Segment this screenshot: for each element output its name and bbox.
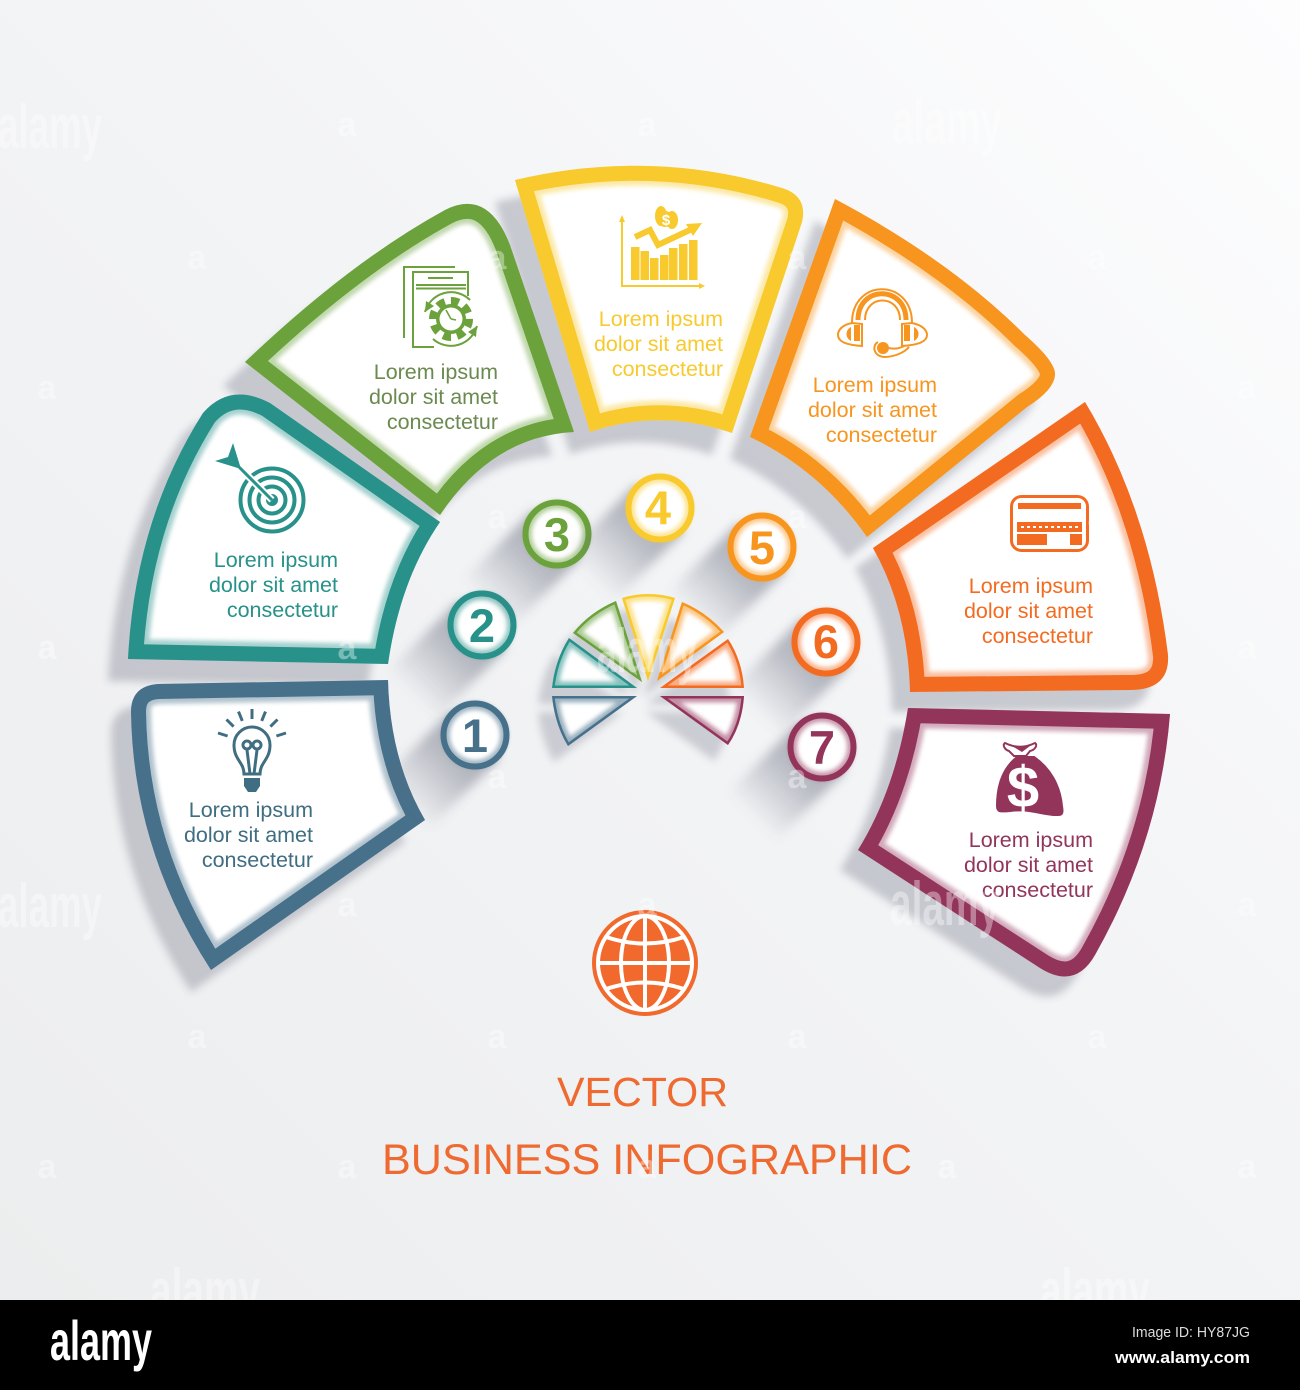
watermarks: alamy xyxy=(597,617,697,686)
icon: headset xyxy=(838,289,927,357)
icon: growth chart with coins: $ xyxy=(662,212,671,229)
watermarks: alamy xyxy=(0,93,102,162)
panel 5: headset xyxy=(750,199,1055,537)
text: panel 6: consectetur xyxy=(982,624,1093,648)
title: VECTOR xyxy=(557,1069,728,1115)
watermarks: a xyxy=(1238,369,1258,407)
icon: money bag xyxy=(997,743,1063,820)
text: panel 5: dolor sit amet xyxy=(808,398,937,422)
text: panel 1: dolor sit amet xyxy=(184,823,313,847)
watermarks: a xyxy=(338,106,358,144)
watermarks: a xyxy=(488,1018,508,1056)
text: panel 1: consectetur xyxy=(202,848,313,872)
watermarks: a xyxy=(188,1018,208,1056)
icon: credit card xyxy=(1012,496,1088,550)
text: panel 1: Lorem ipsum xyxy=(189,798,313,822)
panel 7: money bag xyxy=(858,708,1170,976)
watermarks: a xyxy=(188,498,208,536)
panel 2: target xyxy=(128,395,440,664)
watermarks: alamy xyxy=(0,872,102,941)
watermarks: a xyxy=(1088,239,1108,277)
watermarks: a xyxy=(1088,758,1108,796)
number circle 7 xyxy=(727,716,854,842)
watermarks: a xyxy=(38,629,58,667)
text: panel 5: consectetur xyxy=(826,423,937,447)
watermarks: a xyxy=(488,239,508,277)
text: panel 7: consectetur xyxy=(982,878,1093,902)
number circle 4: 4 xyxy=(645,481,671,534)
icon: growth chart with coins xyxy=(619,206,705,289)
number circle 5 xyxy=(667,516,794,642)
watermarks: a xyxy=(788,758,808,796)
watermarks: a xyxy=(338,629,358,667)
watermarks: a xyxy=(638,369,658,407)
watermarks: a xyxy=(1238,1148,1258,1186)
watermarks: a xyxy=(338,1148,358,1186)
watermarks: a xyxy=(638,886,658,924)
image id: Image ID: HY87JG xyxy=(1132,1324,1250,1341)
watermarks: a xyxy=(788,498,808,536)
number circle 6 xyxy=(731,610,858,737)
watermarks: a xyxy=(38,1148,58,1186)
watermarks: a xyxy=(1238,629,1258,667)
text: panel 5: Lorem ipsum xyxy=(813,373,937,397)
number circle 2 xyxy=(387,594,514,720)
icon: globe xyxy=(592,910,698,1016)
watermarks: a xyxy=(938,369,958,407)
text: panel 3: dolor sit amet xyxy=(369,385,498,409)
title: BUSINESS INFOGRAPHIC xyxy=(382,1136,912,1184)
panel 1: idea xyxy=(131,680,425,970)
watermarks: a xyxy=(188,758,208,796)
watermarks: a xyxy=(488,758,508,796)
number circle 3: 3 xyxy=(544,508,570,561)
small semicircle pie xyxy=(538,594,744,762)
watermarks: a xyxy=(638,1148,658,1186)
watermarks: a xyxy=(788,1018,808,1056)
panel 6: credit card xyxy=(873,402,1168,692)
panel 3: documents xyxy=(245,204,574,515)
text: panel 3: Lorem ipsum xyxy=(374,360,498,384)
watermarks: a xyxy=(188,239,208,277)
watermarks: a xyxy=(938,1148,958,1186)
icon: light bulb xyxy=(218,709,286,792)
website: www.alamy.com xyxy=(1114,1348,1250,1367)
icon: target with arrow xyxy=(215,443,304,532)
number circle 2: 2 xyxy=(469,599,495,652)
text: panel 4: Lorem ipsum xyxy=(599,307,723,331)
watermarks: a xyxy=(38,369,58,407)
watermarks: a xyxy=(338,886,358,924)
text: panel 4: consectetur xyxy=(612,357,723,381)
watermarks: a xyxy=(1238,886,1258,924)
text: panel 6: Lorem ipsum xyxy=(969,574,1093,598)
text: panel 3: consectetur xyxy=(387,410,498,434)
watermarks: alamy xyxy=(892,88,1002,157)
number circle 5: 5 xyxy=(749,521,775,574)
text: panel 2: consectetur xyxy=(227,598,338,622)
number circle 3 xyxy=(462,502,588,629)
footer band xyxy=(0,1300,1300,1390)
panel 4: chart xyxy=(515,166,803,433)
number circle 4 xyxy=(565,476,692,603)
number circle 6: 6 xyxy=(813,615,839,668)
number circle 7: 7 xyxy=(809,721,835,774)
watermarks: alamy xyxy=(1040,1257,1150,1326)
watermarks: alamy xyxy=(890,870,1000,939)
text: panel 2: Lorem ipsum xyxy=(214,548,338,572)
number circle 1: 1 xyxy=(462,709,488,762)
watermarks: a xyxy=(938,629,958,667)
watermarks: a xyxy=(638,106,658,144)
watermarks: a xyxy=(1088,1018,1108,1056)
text: panel 2: dolor sit amet xyxy=(209,573,338,597)
number circle 1 xyxy=(380,704,506,830)
watermarks: a xyxy=(488,498,508,536)
watermarks: a xyxy=(788,239,808,277)
text: panel 4: dolor sit amet xyxy=(594,332,723,356)
panel shadows xyxy=(108,188,1152,996)
icon: money bag: $ xyxy=(1007,755,1039,820)
watermarks: a xyxy=(1088,498,1108,536)
icon: documents and gear clock xyxy=(404,267,477,347)
text: panel 7: Lorem ipsum xyxy=(969,828,1093,852)
text: panel 7: dolor sit amet xyxy=(964,853,1093,877)
watermarks: a xyxy=(338,369,358,407)
text: panel 6: dolor sit amet xyxy=(964,599,1093,623)
footer logo: alamy xyxy=(50,1309,152,1372)
title xyxy=(382,1069,912,1184)
watermarks: alamy xyxy=(150,1257,260,1326)
